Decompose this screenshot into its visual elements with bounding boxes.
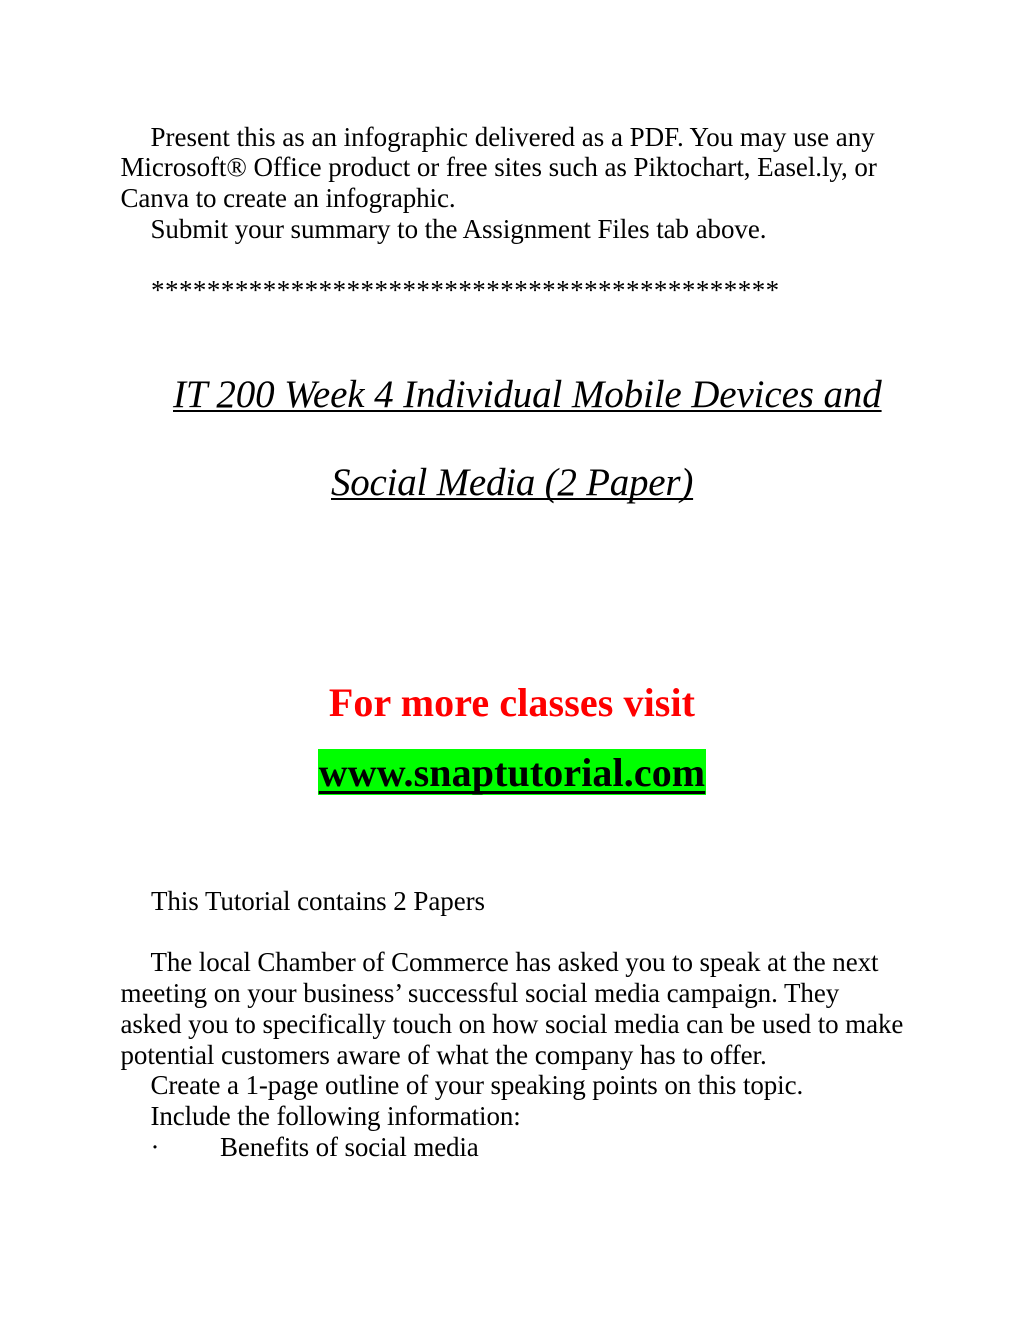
text block: assignment instructions: Microsoft® Office product or free sites such as Piktochart, Easel.ly, or	[120, 152, 877, 182]
text block: scenario and requirements: Include the following information:	[150, 1101, 521, 1131]
text block: scenario and requirements: ·	[150, 1132, 160, 1162]
text block: scenario and requirements: Benefits of social media	[220, 1132, 479, 1162]
text block: scenario and requirements: meeting on your business’ successful social media campaign. They	[120, 978, 839, 1008]
text block: scenario and requirements: The local Chamber of Commerce has asked you to speak at the next	[150, 947, 878, 977]
divider: asterisk row: *********************************************	[151, 275, 780, 305]
title: Social Media (2 Paper)	[331, 461, 693, 504]
text block: scenario and requirements	[120, 947, 903, 1162]
text block: scenario and requirements: potential customers aware of what the company has to offer.	[120, 1040, 767, 1070]
heading: for more classes: For more classes visit	[329, 680, 695, 725]
link: website highlighted: www.snaptutorial.com	[319, 750, 705, 795]
title	[172, 373, 882, 504]
text block: scenario and requirements: asked you to specifically touch on how social media can be used to make	[120, 1009, 903, 1039]
text block: assignment instructions: Canva to create an infographic.	[120, 183, 456, 213]
text block: assignment instructions: Submit your summary to the Assignment Files tab above.	[150, 214, 766, 244]
text block: assignment instructions: Present this as an infographic delivered as a PDF. You may use any	[150, 122, 875, 152]
text block: assignment instructions	[120, 122, 877, 244]
text block: scenario and requirements: Create a 1-page outline of your speaking points on this topic.	[150, 1070, 803, 1100]
text block: tutorial contents: This Tutorial contains 2 Papers	[151, 886, 485, 916]
title: IT 200 Week 4 Individual Mobile Devices and	[173, 373, 882, 416]
